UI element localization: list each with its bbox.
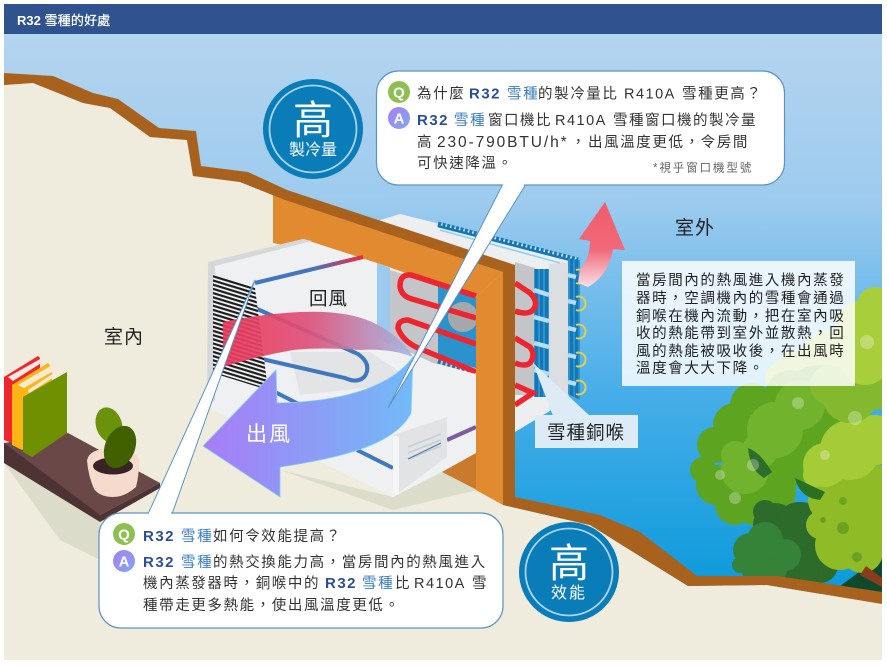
answer text: 可快速降溫。 bbox=[417, 155, 514, 172]
yellow connectors bbox=[576, 270, 586, 394]
question text: 為什麼 bbox=[417, 84, 465, 102]
callout: refrigerant copper pipe: 雪種銅喉 bbox=[547, 422, 625, 443]
wall-mounted shelf with books and plant bbox=[4, 356, 160, 560]
answer text: 雪種 bbox=[454, 112, 486, 129]
answer text: R32 bbox=[417, 112, 449, 129]
brown wall edge bbox=[4, 73, 882, 604]
Q icon: Q bbox=[393, 84, 405, 102]
yellow book bbox=[12, 363, 52, 450]
gray coil plate bbox=[515, 262, 535, 395]
answer text: 雪種 bbox=[362, 575, 394, 592]
question text: 雪種 bbox=[507, 86, 539, 102]
refrigerant pipes bbox=[255, 257, 476, 468]
header title: R32 雪種的好處 bbox=[17, 13, 110, 28]
shelf bbox=[4, 433, 160, 515]
gray coil plate left bbox=[390, 270, 476, 373]
info text panel: 當房間內的熱風進入機內蒸發 bbox=[636, 272, 845, 289]
answer text: R410A bbox=[414, 576, 466, 592]
label: indoor: 室內 bbox=[104, 326, 144, 348]
badge: high cooling capacity bbox=[263, 79, 363, 179]
question bubble: cooling capacity bbox=[376, 71, 784, 408]
supply air arrow bbox=[203, 357, 413, 497]
red book bbox=[4, 356, 40, 443]
rear fins bbox=[568, 258, 580, 400]
side fins bbox=[534, 269, 549, 397]
return air arrow bbox=[223, 312, 413, 367]
badge: high efficiency bbox=[519, 522, 619, 622]
answer text: R32 bbox=[325, 575, 357, 592]
info text panel: 溫度會大大下降。 bbox=[636, 360, 765, 377]
info text panel: 風的熱能被吸收後，在出風時 bbox=[636, 343, 845, 360]
intake grille bbox=[213, 274, 268, 390]
badge: high cooling capacity: 製冷量 bbox=[289, 141, 337, 159]
fins under the fan bbox=[438, 361, 476, 372]
heat-exchanger fins top bbox=[438, 224, 578, 260]
red copper coils right side bbox=[515, 283, 536, 405]
answer text: 高 bbox=[417, 134, 433, 151]
A icon: A bbox=[119, 554, 130, 570]
answer text bbox=[417, 112, 757, 172]
label: return air: 回風 bbox=[309, 288, 348, 309]
badge: high efficiency: 效能 bbox=[551, 584, 587, 602]
internal floor bbox=[290, 352, 400, 395]
shelf shadow bbox=[4, 463, 100, 560]
indoor unit body bbox=[207, 239, 476, 497]
indoor unit bbox=[207, 239, 476, 497]
front vent panel bbox=[393, 417, 447, 497]
label: supply air: 出風 bbox=[246, 423, 292, 446]
answer text: R410A bbox=[555, 113, 607, 129]
Q icon bbox=[388, 81, 410, 103]
answer text: 230-790BTU/h* bbox=[437, 134, 569, 151]
red copper coils left side bbox=[398, 275, 476, 372]
tree bbox=[690, 287, 887, 600]
A icon bbox=[388, 107, 410, 129]
answer text: R32 bbox=[143, 554, 175, 571]
question text: R32 bbox=[469, 86, 501, 102]
info text panel: 銅喉在機內流動，把在室內吸 bbox=[636, 308, 845, 325]
answer text: 窗口機比 bbox=[488, 112, 552, 129]
callout: refrigerant copper pipe bbox=[533, 363, 638, 448]
question bubble: efficiency bbox=[99, 280, 503, 628]
question text: R32 bbox=[143, 528, 175, 545]
answer text: 比 bbox=[395, 575, 411, 592]
answer text bbox=[143, 553, 488, 614]
orange wall band bbox=[273, 195, 503, 297]
answer text: 出風溫度更低，令房間 bbox=[588, 134, 749, 151]
upward hot air arrow bbox=[578, 202, 625, 287]
badge: high cooling capacity: 高 bbox=[293, 99, 333, 143]
blue fan housing bbox=[438, 286, 476, 368]
answer text: 機內蒸發器時，銅喉中的 bbox=[143, 575, 320, 592]
Q icon: Q bbox=[118, 526, 130, 544]
window interior behind indoor unit bbox=[390, 270, 478, 373]
outdoor unit bbox=[380, 214, 586, 432]
info text panel: 器時，空調機內的雪種會通過 bbox=[636, 290, 845, 307]
footnote: *視乎窗口機型號 bbox=[653, 160, 753, 174]
answer text: 雪種 bbox=[181, 554, 213, 571]
answer text: 的熱交換能力高，當房間內的熱風進入 bbox=[213, 553, 487, 571]
question text: 雪種 bbox=[181, 528, 213, 545]
fan bbox=[448, 302, 478, 332]
green book bbox=[23, 372, 67, 457]
answer text: 種帶走更多熱能，使出風溫度更低。 bbox=[143, 596, 401, 614]
wall shadow under the unit bbox=[280, 470, 477, 510]
cross tubes bbox=[534, 275, 576, 384]
info text panel: 收的熱能帶到室外並散熱，回 bbox=[636, 325, 845, 342]
answer text: 雪種窗口機的製冷量 bbox=[613, 112, 757, 129]
question text: 雪種更高？ bbox=[682, 86, 762, 102]
outdoor unit casing bbox=[380, 214, 577, 432]
question text: R410A bbox=[624, 86, 676, 102]
badge: high efficiency: 高 bbox=[549, 542, 589, 586]
answer text: 雪 bbox=[472, 576, 488, 592]
header bar bbox=[4, 4, 882, 34]
vertical orange wall post bbox=[476, 272, 503, 505]
info text panel bbox=[622, 261, 855, 386]
A icon: A bbox=[394, 110, 405, 128]
question text: 如何令效能提高？ bbox=[213, 528, 342, 545]
plant pot bbox=[87, 448, 139, 497]
answer text: ， bbox=[571, 135, 587, 151]
plant leaves bbox=[91, 404, 127, 446]
orange wall lower return bbox=[442, 453, 477, 490]
Q icon bbox=[113, 523, 135, 545]
label: outdoor: 室外 bbox=[675, 217, 715, 239]
A icon bbox=[113, 550, 135, 572]
question text: 的製冷量比 bbox=[538, 86, 618, 102]
sky seen through window bbox=[377, 263, 390, 345]
